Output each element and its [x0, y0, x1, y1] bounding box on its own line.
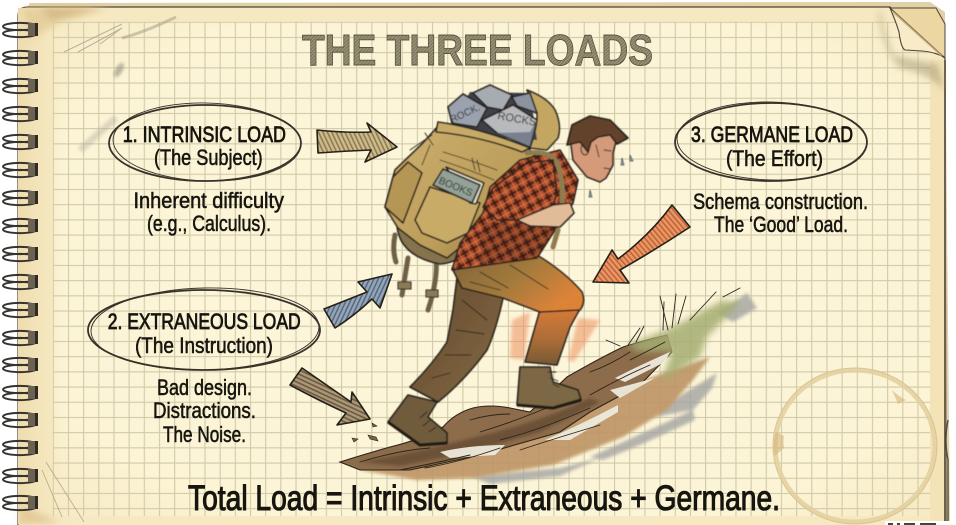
backpack front pocket	[415, 187, 480, 243]
front thigh	[452, 255, 584, 312]
hillside: grass	[627, 300, 740, 383]
pencil smudges	[42, 17, 176, 522]
neck and face	[570, 120, 617, 182]
front shin	[525, 305, 582, 365]
illustration: hillside	[340, 288, 757, 484]
spiral binding	[3, 23, 38, 510]
rocks	[448, 85, 537, 147]
panel: intrinsic load	[109, 101, 302, 236]
description: germane: Schema construction.	[693, 189, 868, 214]
backpack flap	[527, 90, 559, 150]
hillside: grass tufts	[606, 288, 740, 346]
sleeve	[483, 160, 557, 220]
ear	[581, 143, 589, 155]
subheading: extraneous: (The Instruction)	[135, 333, 273, 358]
backpack body	[385, 124, 535, 258]
coffee ring	[773, 368, 937, 524]
description: extraneous: Bad design.	[157, 375, 252, 400]
description: germane	[693, 189, 868, 237]
arrow: extraneous to backpack	[324, 274, 392, 328]
folded page corner	[878, 8, 945, 90]
hillside: mud splashes	[352, 423, 378, 442]
rear boot	[388, 395, 447, 445]
illustration: hiker	[385, 85, 633, 445]
description: intrinsic	[134, 188, 284, 236]
hillside: mud strokes	[360, 342, 665, 470]
backpack buckles	[410, 133, 497, 180]
footer mark	[885, 521, 956, 525]
thigh creases	[470, 265, 548, 290]
hillside: dark mud shading	[360, 398, 600, 466]
hair	[567, 116, 628, 152]
oval: intrinsic	[109, 101, 302, 183]
heading: germane: 3. GERMANE LOAD	[691, 122, 853, 147]
shirt shadow	[480, 206, 553, 264]
front boot	[517, 367, 581, 408]
description: intrinsic: Inherent difficulty	[134, 188, 284, 213]
label: rocks: ROCKS	[496, 110, 537, 129]
hillside: water streaks	[440, 352, 670, 458]
knee heat	[510, 312, 600, 362]
panel: extraneous load	[88, 286, 320, 447]
arrow: germane to knee	[593, 205, 690, 283]
back leg	[410, 270, 503, 402]
hillside: brown wash	[360, 357, 710, 480]
oval: extraneous	[88, 286, 320, 372]
description: extraneous: Distractions.	[153, 398, 256, 423]
book	[433, 167, 484, 204]
description: extraneous: The Noise.	[163, 422, 246, 447]
arrow: intrinsic to backpack	[317, 123, 397, 162]
panel: germane load	[675, 100, 868, 237]
back leg creases	[432, 300, 487, 378]
subheading: germane: (The Effort)	[726, 146, 823, 171]
oval: germane	[675, 100, 868, 182]
backpack straps	[394, 235, 438, 310]
title: THE THREE LOADS	[302, 26, 653, 75]
total load equation: Total Load = Intrinsic + Extraneous + Germane.	[188, 479, 780, 518]
shirt	[452, 150, 578, 270]
heading: intrinsic: 1. INTRINSIC LOAD	[123, 122, 286, 147]
description: germane: The ‘Good’ Load.	[714, 212, 848, 237]
label: books: BOOKS	[437, 176, 474, 199]
backpack side pocket	[385, 162, 422, 223]
description: extraneous	[153, 375, 256, 447]
arrow: extraneous to boot	[290, 368, 370, 425]
description: intrinsic: (e.g., Calculus).	[147, 211, 271, 236]
subheading: intrinsic: (The Subject)	[154, 145, 263, 170]
sweat drops	[589, 155, 633, 197]
heading: extraneous: 2. EXTRANEOUS LOAD	[108, 309, 301, 334]
hillside: mud	[340, 335, 672, 470]
backpack lower section	[397, 220, 482, 264]
backpack rim	[436, 122, 530, 152]
label: rock: ROCK.	[449, 102, 482, 126]
shoulder strap	[527, 152, 562, 247]
hillside: grey wash	[470, 293, 757, 484]
forearm and hand	[517, 203, 574, 227]
eye and mouth	[596, 145, 611, 169]
